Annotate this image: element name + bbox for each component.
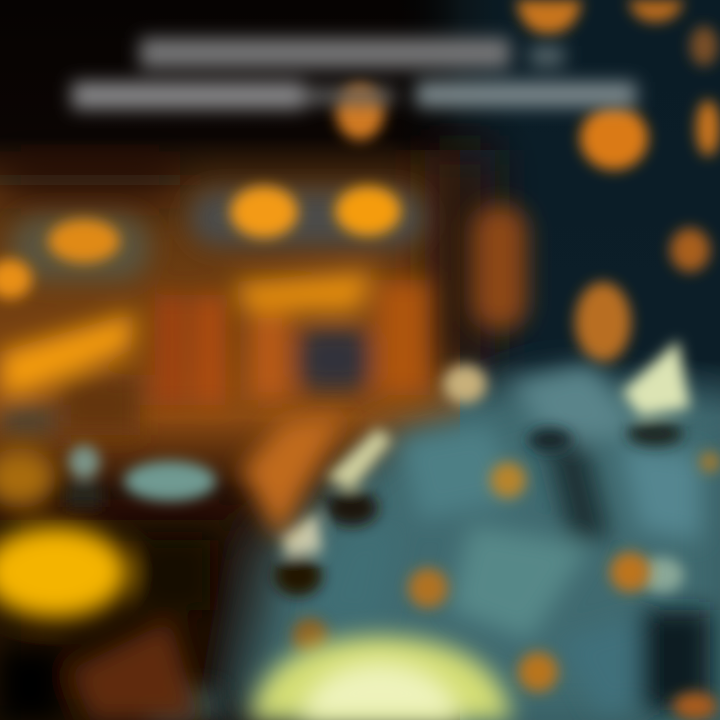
icon: orange discs [0,0,720,362]
icon: pale highlights [66,340,690,596]
panel: yellow glow lower left [0,415,345,720]
icon: small orange studs [292,452,720,720]
title [72,38,636,109]
panel: upper orange band [0,190,527,435]
panel: teal lower right field [150,365,710,720]
icon: glowing bulb [250,636,512,720]
